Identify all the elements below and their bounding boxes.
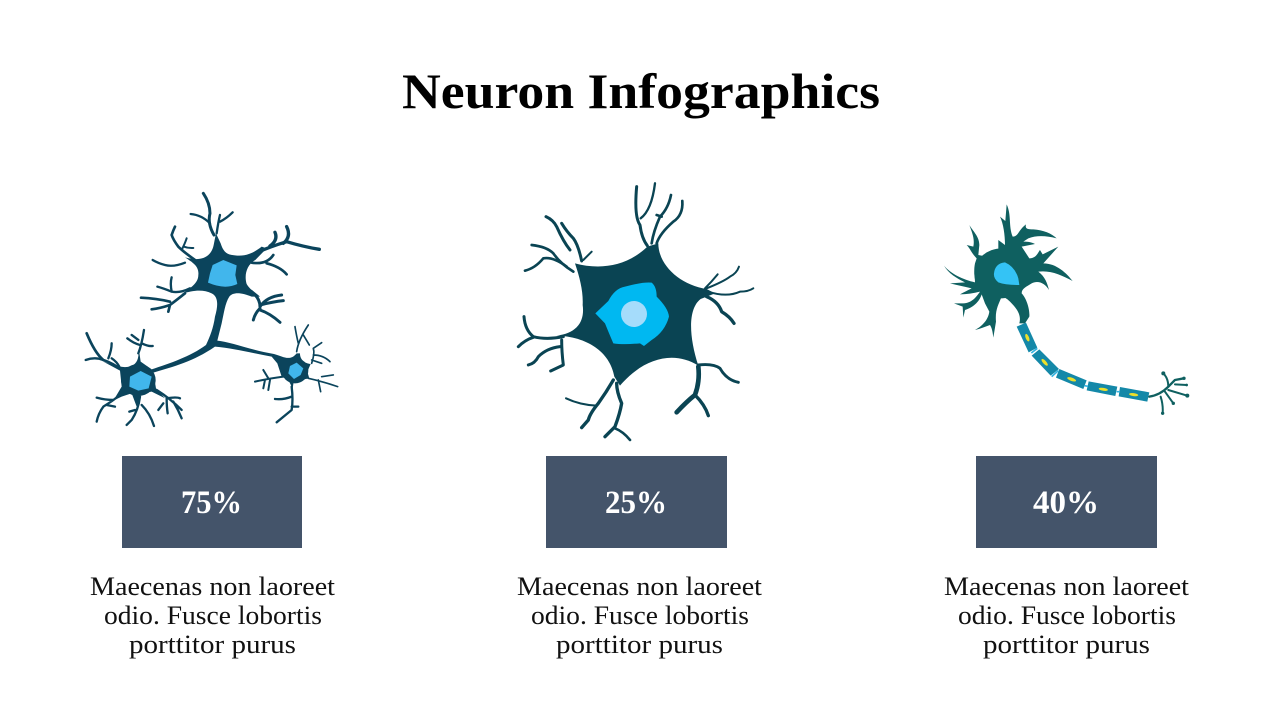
value box 25% (546, 456, 727, 548)
panel: neuron group 40% (944, 204, 1190, 659)
text block 3: porttitor purus (983, 630, 1150, 659)
title: Neuron Infographics (402, 63, 880, 119)
text block 3: odio. Fusce lobortis (958, 601, 1176, 630)
value box 75% (122, 456, 302, 548)
value box 25%: 25% (605, 485, 667, 521)
value box 40%: 40% (1033, 485, 1099, 521)
panel: neuron group 25% (517, 183, 763, 659)
text block 1 (90, 572, 336, 659)
value box 75%: 75% (181, 485, 242, 521)
text block 3: Maecenas non laoreet (944, 572, 1190, 601)
panel: neuron group 75% (86, 193, 338, 659)
text block 2: Maecenas non laoreet (517, 572, 763, 601)
icon: three connected neurons (86, 193, 338, 426)
value box 40% (976, 456, 1157, 548)
icon: star-shaped neuron (518, 183, 753, 440)
axon terminal (1149, 373, 1187, 413)
icon: neuron with myelinated axon (944, 204, 1189, 415)
myelin sheath segments (1017, 323, 1149, 402)
text block 1: porttitor purus (129, 630, 296, 659)
text block 1: Maecenas non laoreet (90, 572, 336, 601)
text block 2 (517, 572, 763, 659)
text block 1: odio. Fusce lobortis (104, 601, 322, 630)
text block 2: porttitor purus (556, 630, 723, 659)
text block 3 (944, 572, 1190, 659)
text block 2: odio. Fusce lobortis (531, 601, 749, 630)
